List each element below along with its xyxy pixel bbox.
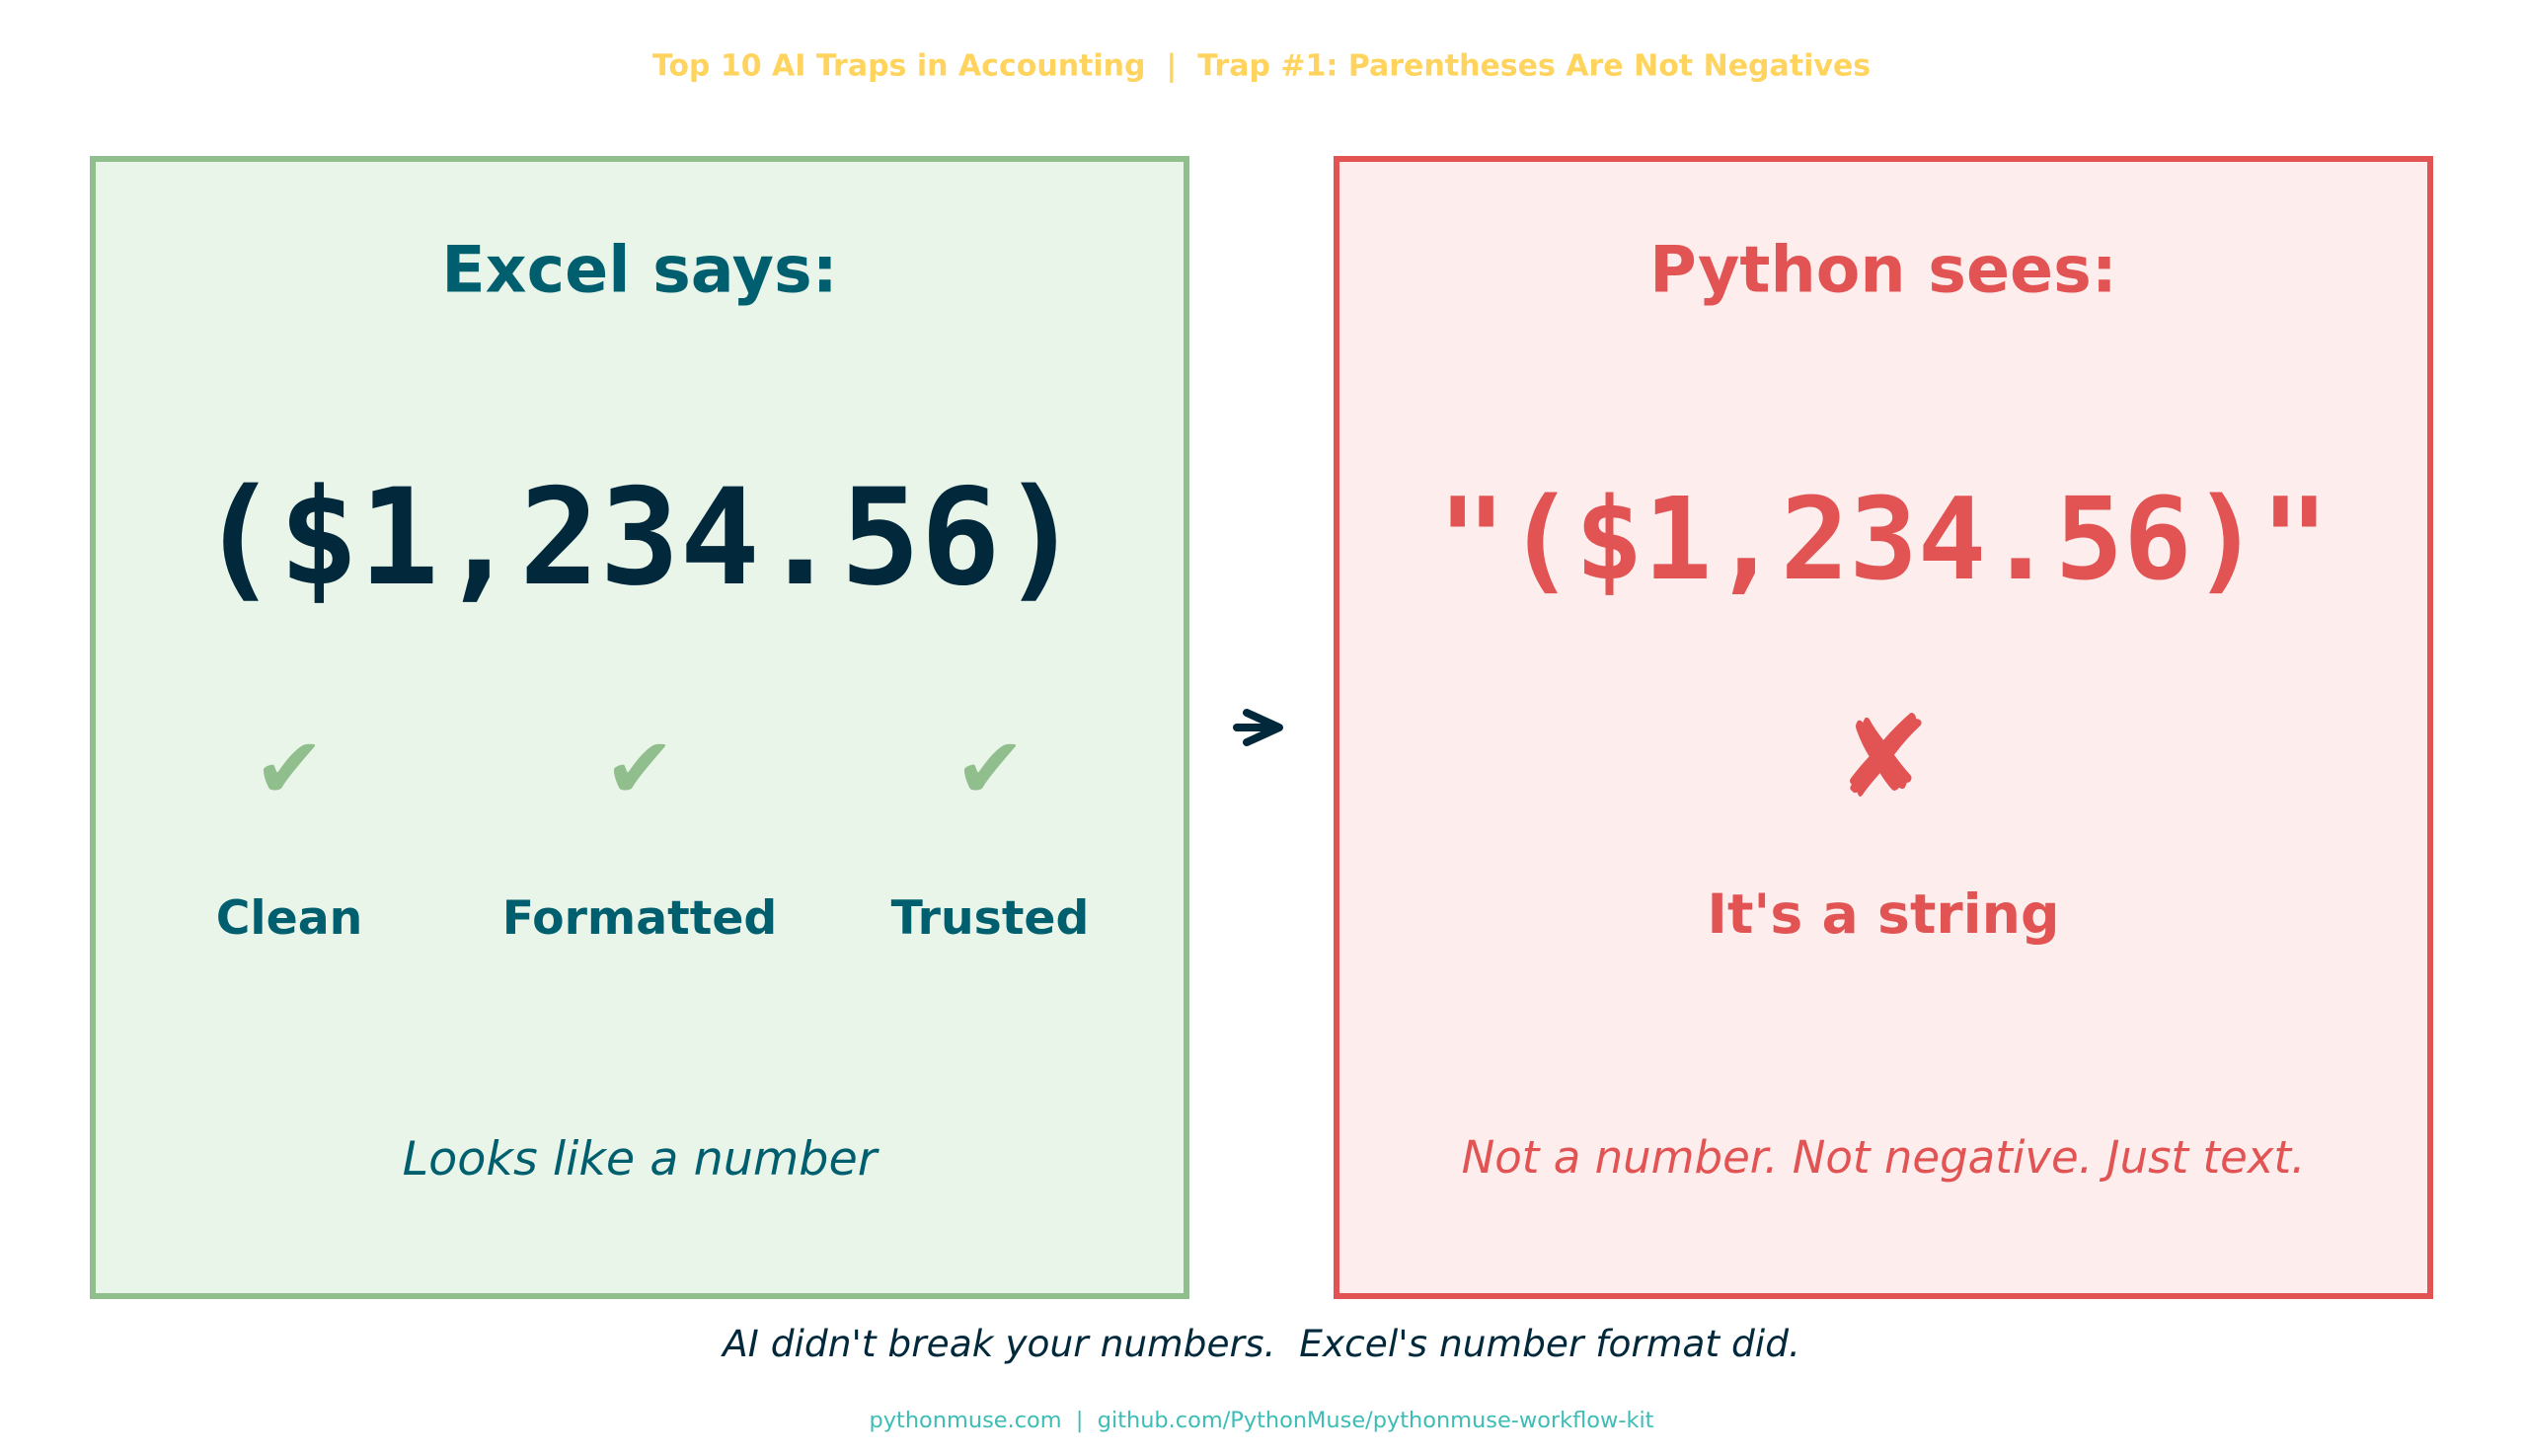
panel: Excel says bbox=[93, 159, 1186, 1296]
label: formatted: Formatted bbox=[502, 891, 777, 946]
icon: check clean: ✔ bbox=[254, 720, 325, 818]
arrow bbox=[1237, 713, 1279, 742]
panel heading: Python sees: bbox=[1649, 233, 2117, 308]
large formatted number: ($1,234.56) bbox=[198, 460, 1081, 615]
icon: check formatted: ✔ bbox=[604, 720, 675, 818]
panel background bbox=[93, 159, 1186, 1296]
label: clean: Clean bbox=[216, 891, 362, 946]
panel heading: Excel says: bbox=[441, 233, 838, 308]
footer links: pythonmuse.com | github.com/PythonMuse/pythonmuse-workflow-kit bbox=[870, 1408, 1654, 1433]
panel background bbox=[1337, 159, 2430, 1296]
quoted string value: "($1,234.56)" bbox=[1437, 474, 2330, 606]
icon: cross: ✘ bbox=[1836, 692, 1931, 824]
tagline: AI didn't break your numbers. Excel's number format did. bbox=[721, 1322, 1800, 1365]
caption: Not a number. Not negative. Just text. bbox=[1462, 1131, 2305, 1184]
icon: check trusted: ✔ bbox=[955, 720, 1026, 818]
title: Top 10 AI Traps in Accounting | Trap #1: Parentheses Are Not Negatives bbox=[652, 49, 1871, 83]
panel: Python sees bbox=[1337, 159, 2430, 1296]
label: trusted: Trusted bbox=[891, 891, 1089, 946]
label: string: It's a string bbox=[1707, 883, 2060, 947]
caption: Looks like a number bbox=[403, 1132, 880, 1187]
